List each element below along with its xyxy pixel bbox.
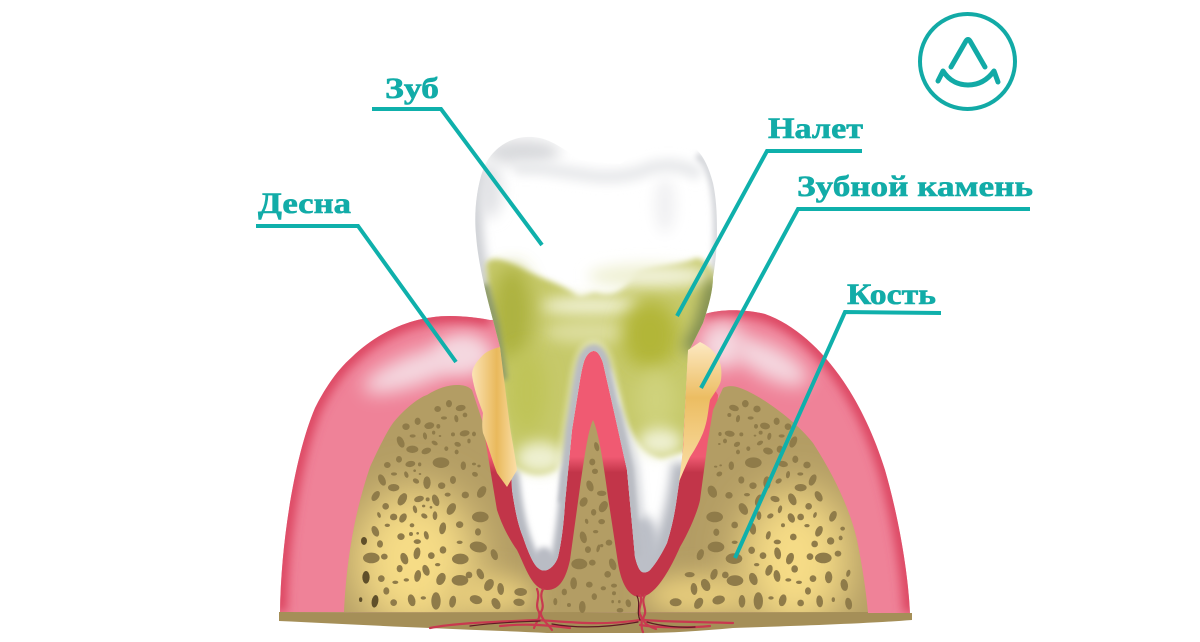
label: Зубной камень: Зубной камень xyxy=(797,170,1033,203)
tooth xyxy=(475,137,717,572)
calculus left xyxy=(472,347,517,487)
tooth diagram illustration and labels xyxy=(256,12,1032,634)
label: Зубной камень xyxy=(701,170,1033,388)
blood vessels xyxy=(430,589,733,632)
bone pores right xyxy=(597,400,853,613)
bone pores left xyxy=(359,400,601,613)
gum xyxy=(270,300,920,620)
label: Десна: Десна xyxy=(258,187,351,220)
gum pocket red band xyxy=(483,350,718,605)
bone xyxy=(344,385,868,613)
base slab under bone xyxy=(279,612,912,633)
label: Десна xyxy=(256,187,456,362)
crown and root shading xyxy=(475,139,717,584)
calculus right xyxy=(679,342,721,482)
label: Зуб: Зуб xyxy=(385,72,439,105)
icon: logo xyxy=(920,14,1015,109)
label: Налет: Налет xyxy=(768,112,863,145)
label: Кость xyxy=(735,278,941,558)
label: Налет xyxy=(677,112,863,316)
label: Зуб xyxy=(372,72,542,245)
plaque xyxy=(484,258,716,557)
label: Кость: Кость xyxy=(847,278,936,311)
